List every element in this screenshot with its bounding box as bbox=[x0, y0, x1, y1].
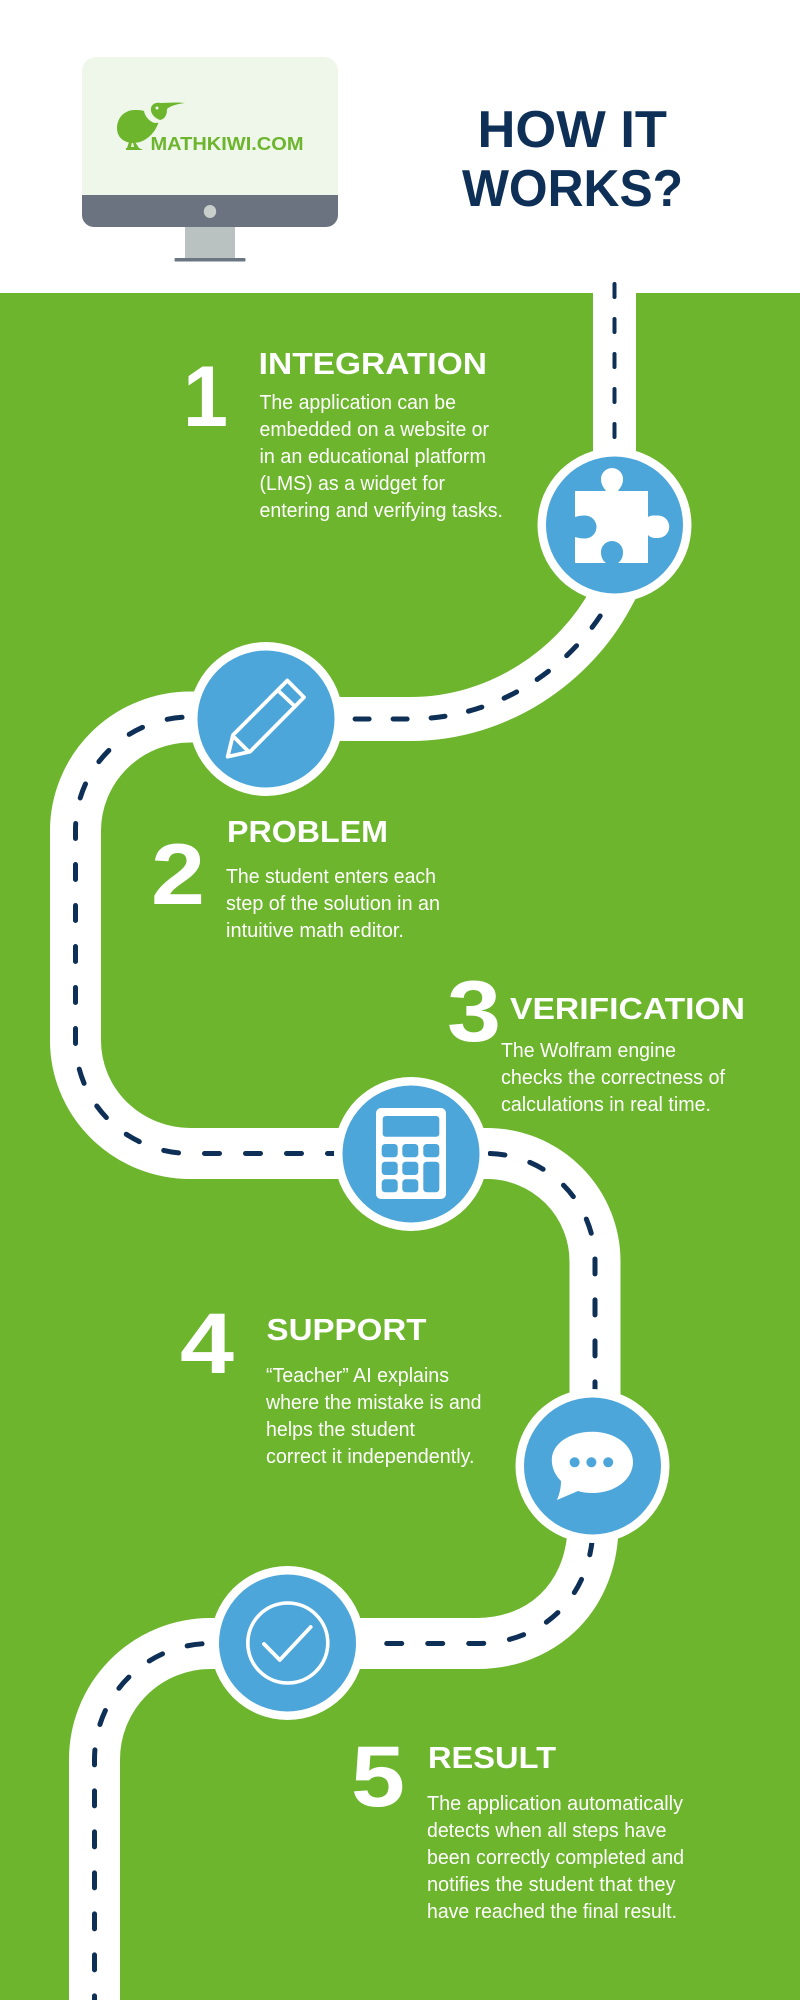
step 4 body text: helps the student bbox=[266, 1419, 415, 1441]
step 5 body text: detects when all steps have bbox=[427, 1820, 666, 1842]
winding road bbox=[75, 270, 629, 2000]
step 1: integration: INTEGRATION bbox=[259, 346, 487, 381]
step 4 body text: where the mistake is and bbox=[265, 1392, 482, 1414]
step 2 body text: step of the solution in an bbox=[226, 893, 440, 915]
step 1 body text: (LMS) as a widget for bbox=[260, 473, 445, 495]
step 4 body text bbox=[265, 1365, 482, 1468]
step 1 body text: in an educational platform bbox=[260, 446, 486, 468]
step 5 body text: have reached the final result. bbox=[427, 1901, 677, 1923]
step 1: integration bbox=[183, 346, 503, 522]
step 4 body text: correct it independently. bbox=[266, 1446, 474, 1468]
step 5 body text bbox=[427, 1793, 684, 1923]
step 3 body text: calculations in real time. bbox=[501, 1094, 711, 1116]
step 3: verification: VERIFICATION bbox=[510, 991, 745, 1026]
step 2 body text bbox=[226, 866, 440, 942]
step 1 body text: embedded on a website or bbox=[260, 419, 489, 441]
step 3: verification bbox=[447, 964, 745, 1116]
step 5 body text: notifies the student that they bbox=[427, 1874, 676, 1896]
step 5: result bbox=[351, 1729, 684, 1923]
step 3 body text: The Wolfram engine bbox=[501, 1040, 676, 1062]
step 5: result: RESULT bbox=[428, 1740, 556, 1775]
step 4 body text: “Teacher” AI explains bbox=[266, 1365, 449, 1387]
title bbox=[462, 101, 683, 218]
step 5 body text: been correctly completed and bbox=[427, 1847, 684, 1869]
step 5 body text: The application automatically bbox=[427, 1793, 683, 1815]
step 1: integration: 1 bbox=[183, 349, 228, 445]
icon: calculator in circle bbox=[334, 1077, 488, 1231]
step 4: support: SUPPORT bbox=[266, 1312, 427, 1347]
icon: puzzle piece in circle bbox=[538, 448, 692, 602]
step 1 body text: The application can be bbox=[260, 392, 456, 414]
icon: check mark in circle bbox=[210, 1566, 364, 1720]
title: WORKS? bbox=[462, 160, 683, 218]
step 5: result: 5 bbox=[351, 1729, 405, 1825]
step 3 body text: checks the correctness of bbox=[501, 1067, 725, 1089]
road centre dashes bbox=[75, 284, 614, 2000]
step 2: problem: PROBLEM bbox=[227, 814, 388, 849]
logo: kiwi bird bbox=[117, 103, 185, 150]
step 4: support: 4 bbox=[180, 1296, 234, 1392]
step 2: problem bbox=[151, 814, 440, 942]
logo wordmark: MATHKIWI.COM bbox=[150, 133, 304, 154]
step 3: verification: 3 bbox=[447, 964, 501, 1060]
step 1 body text: entering and verifying tasks. bbox=[260, 500, 503, 522]
step 1 body text bbox=[260, 392, 503, 522]
icon: desktop monitor with MathKiwi logo bbox=[82, 57, 338, 262]
icon: speech bubble in circle bbox=[516, 1389, 670, 1543]
title: HOW IT bbox=[478, 101, 667, 159]
step 2 body text: intuitive math editor. bbox=[226, 920, 404, 942]
step 3 body text bbox=[501, 1040, 725, 1116]
step 4: support bbox=[180, 1296, 482, 1468]
step 2 body text: The student enters each bbox=[226, 866, 436, 888]
icon: pencil in circle bbox=[189, 642, 343, 796]
step 2: problem: 2 bbox=[151, 827, 205, 923]
